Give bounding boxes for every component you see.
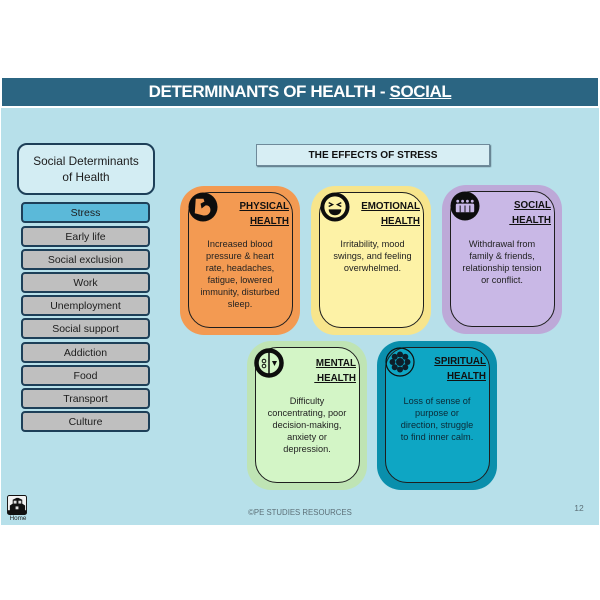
heading: spiritual health: HEALTH [447,371,486,382]
menu button: transport: Transport [63,393,108,405]
text: physical effects [200,239,279,309]
menu button: culture [21,411,150,432]
heading: spiritual health: SPIRITUAL [434,356,486,367]
menu button: work [21,272,150,293]
text: emotional effects: Irritability, mood [340,239,405,249]
text: mental effects [268,396,346,454]
panel: social health [442,185,562,334]
text: social effects [462,239,542,285]
text: mental effects: decision-making, [273,420,341,430]
title: the effects of stress: THE EFFECTS OF STRESS [308,150,438,161]
menu button: addiction [21,342,150,363]
text: physical effects: Increased blood [207,239,273,249]
heading: social determinants of health: Social Determinants [33,154,139,168]
page number: 12 [574,503,584,513]
menu button: early life: Early life [65,230,106,242]
text: social effects: relationship tension [462,263,542,273]
panel: mental health [247,341,367,490]
menu button: addiction: Addiction [64,347,107,359]
header bar: DETERMINANTS OF HEALTH - SOCIAL [149,82,451,101]
text: social effects: or conflict. [481,275,523,285]
heading: emotional health: EMOTIONAL [361,201,420,212]
text: physical effects: rate, headaches, [206,263,274,273]
icon: mandala [385,347,415,377]
menu button: unemployment: Unemployment [50,300,121,312]
heading: emotional health: HEALTH [381,216,420,227]
menu button: unemployment [21,295,150,316]
menu button: transport [21,388,150,409]
heading: mental health: HEALTH [317,373,356,384]
icon: laughing face [320,192,350,222]
text: physical effects: fatigue, lowered [208,275,272,285]
menu button: stress [21,202,150,223]
text: mental effects: concentrating, poor [268,408,346,418]
icon: group of people [450,192,480,220]
text: physical effects: immunity, disturbed [200,287,279,297]
heading: social health: SOCIAL [514,200,551,211]
footer copyright: ©PE STUDIES RESOURCES [248,508,352,517]
menu button: social support [21,318,150,339]
menu button: stress: Stress [71,207,100,219]
heading: social health [509,200,551,226]
home label: Home [10,514,26,522]
heading: mental health: MENTAL [316,358,356,369]
text: spiritual effects: purpose or [415,408,459,418]
text: emotional effects [333,239,412,273]
text: physical effects: sleep. [228,299,252,309]
heading: social health: HEALTH [512,215,551,226]
text: social effects: Withdrawal from [469,239,535,249]
heading: emotional health [361,201,420,227]
header bar [2,78,598,106]
icon: brain [254,348,284,378]
slide background [1,108,599,525]
text: mental effects: anxiety or [287,432,327,442]
title: the effects of stress [256,144,490,166]
text: mental effects: Difficulty [290,396,324,406]
heading: spiritual health [434,356,486,382]
text: physical effects: pressure & heart [206,251,274,261]
text: mental effects: depression. [283,444,331,454]
panel: spiritual health [377,341,497,490]
text: spiritual effects: Loss of sense of [404,396,470,406]
heading: social determinants of health: of Health [62,170,110,184]
menu button: early life [21,226,150,246]
text: spiritual effects: to find inner calm. [401,432,473,442]
text: emotional effects: swings, and feeling [333,251,412,261]
icon: flexed arm [188,192,218,222]
text: emotional effects: overwhelmed. [344,263,401,273]
menu button: social exclusion: Social exclusion [48,254,123,266]
panel: emotional health [311,186,431,335]
text: spiritual effects: direction, struggle [401,420,473,430]
menu button: food: Food [74,370,97,382]
heading: physical health: HEALTH [250,216,289,227]
menu button: work: Work [73,277,98,289]
heading: physical health: PHYSICAL [239,201,289,212]
icon: home button [7,495,27,522]
menu button: social exclusion [21,249,150,270]
menu button: food [21,365,150,386]
text: social effects: family & friends, [469,251,535,261]
text: spiritual effects [400,396,473,442]
menu button: culture: Culture [69,416,102,428]
panel: physical health [180,186,300,335]
menu button: social support: Social support [52,323,119,335]
heading: mental health [314,358,356,384]
heading: physical health [239,201,289,227]
heading: social determinants of health [17,143,155,195]
